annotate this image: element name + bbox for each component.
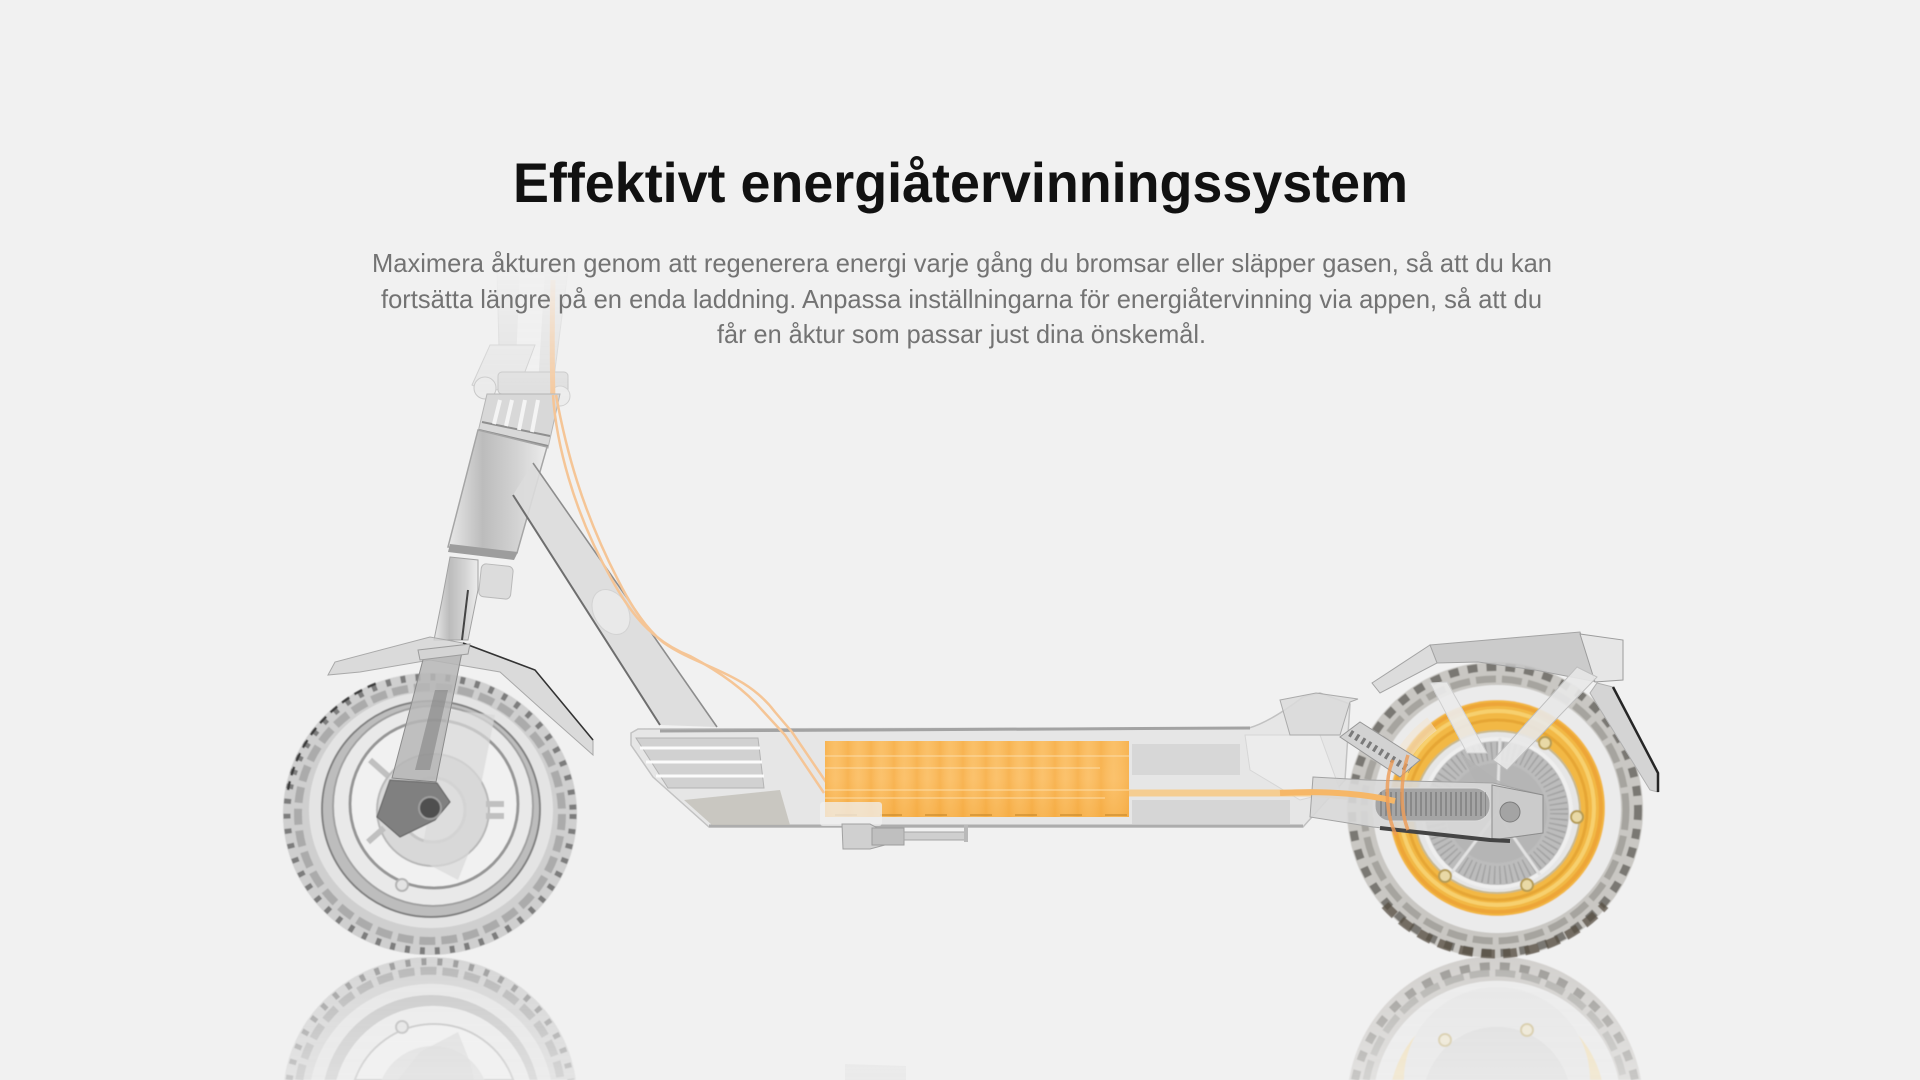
rear fender <box>1372 632 1658 792</box>
front fender <box>328 637 593 755</box>
swingarm <box>1280 755 1543 841</box>
struts <box>1430 667 1597 790</box>
steering diagonal beam <box>513 463 717 727</box>
fork lower leg <box>392 652 462 782</box>
cable to rear motor <box>1129 793 1400 801</box>
ring highlight upper left <box>1396 724 1432 770</box>
reflection: scooter wheels on floor <box>284 956 1641 1080</box>
deck lower wedge <box>684 790 790 825</box>
stem tube <box>448 430 547 553</box>
rear deck bracket <box>1280 693 1358 735</box>
reflection: kickstand <box>845 1064 906 1080</box>
front fork <box>434 557 514 640</box>
rear shock absorber <box>1340 722 1420 777</box>
kickstand clamp <box>820 802 968 849</box>
tail light <box>1580 634 1623 682</box>
stem collar <box>478 394 560 448</box>
cables <box>553 395 826 793</box>
fender front part <box>1372 645 1437 693</box>
reflection: rear wheel <box>1349 956 1641 1080</box>
stem upper section fading out <box>472 270 570 406</box>
deck <box>631 693 1350 827</box>
deck front internals <box>636 738 764 788</box>
description text: Maximera åkturen genom att regenerera energi varje gång du bromsar eller släpper gasen, så att du kan <box>372 248 1552 278</box>
scooter illustration <box>283 270 1658 958</box>
battery cells <box>825 741 1129 817</box>
title: Effektivt energiåtervinningssystem <box>513 151 1408 214</box>
deck rear internals <box>1132 744 1240 775</box>
fork crown <box>418 644 470 660</box>
description text: fortsätta längre på en enda laddning. Anpassa inställningarna för energiåtervinning via appen, så att du <box>381 284 1542 314</box>
reflection: front wheel <box>284 957 576 1080</box>
front hub <box>377 780 450 837</box>
mudguard tail <box>1590 683 1658 792</box>
description text: får en åktur som passar just dina önskemål. <box>717 319 1206 349</box>
rear wheel <box>1347 662 1643 958</box>
description text <box>372 248 1552 349</box>
fender dark edge <box>463 643 593 740</box>
battery pack <box>825 741 1129 817</box>
front wheel <box>283 673 577 955</box>
